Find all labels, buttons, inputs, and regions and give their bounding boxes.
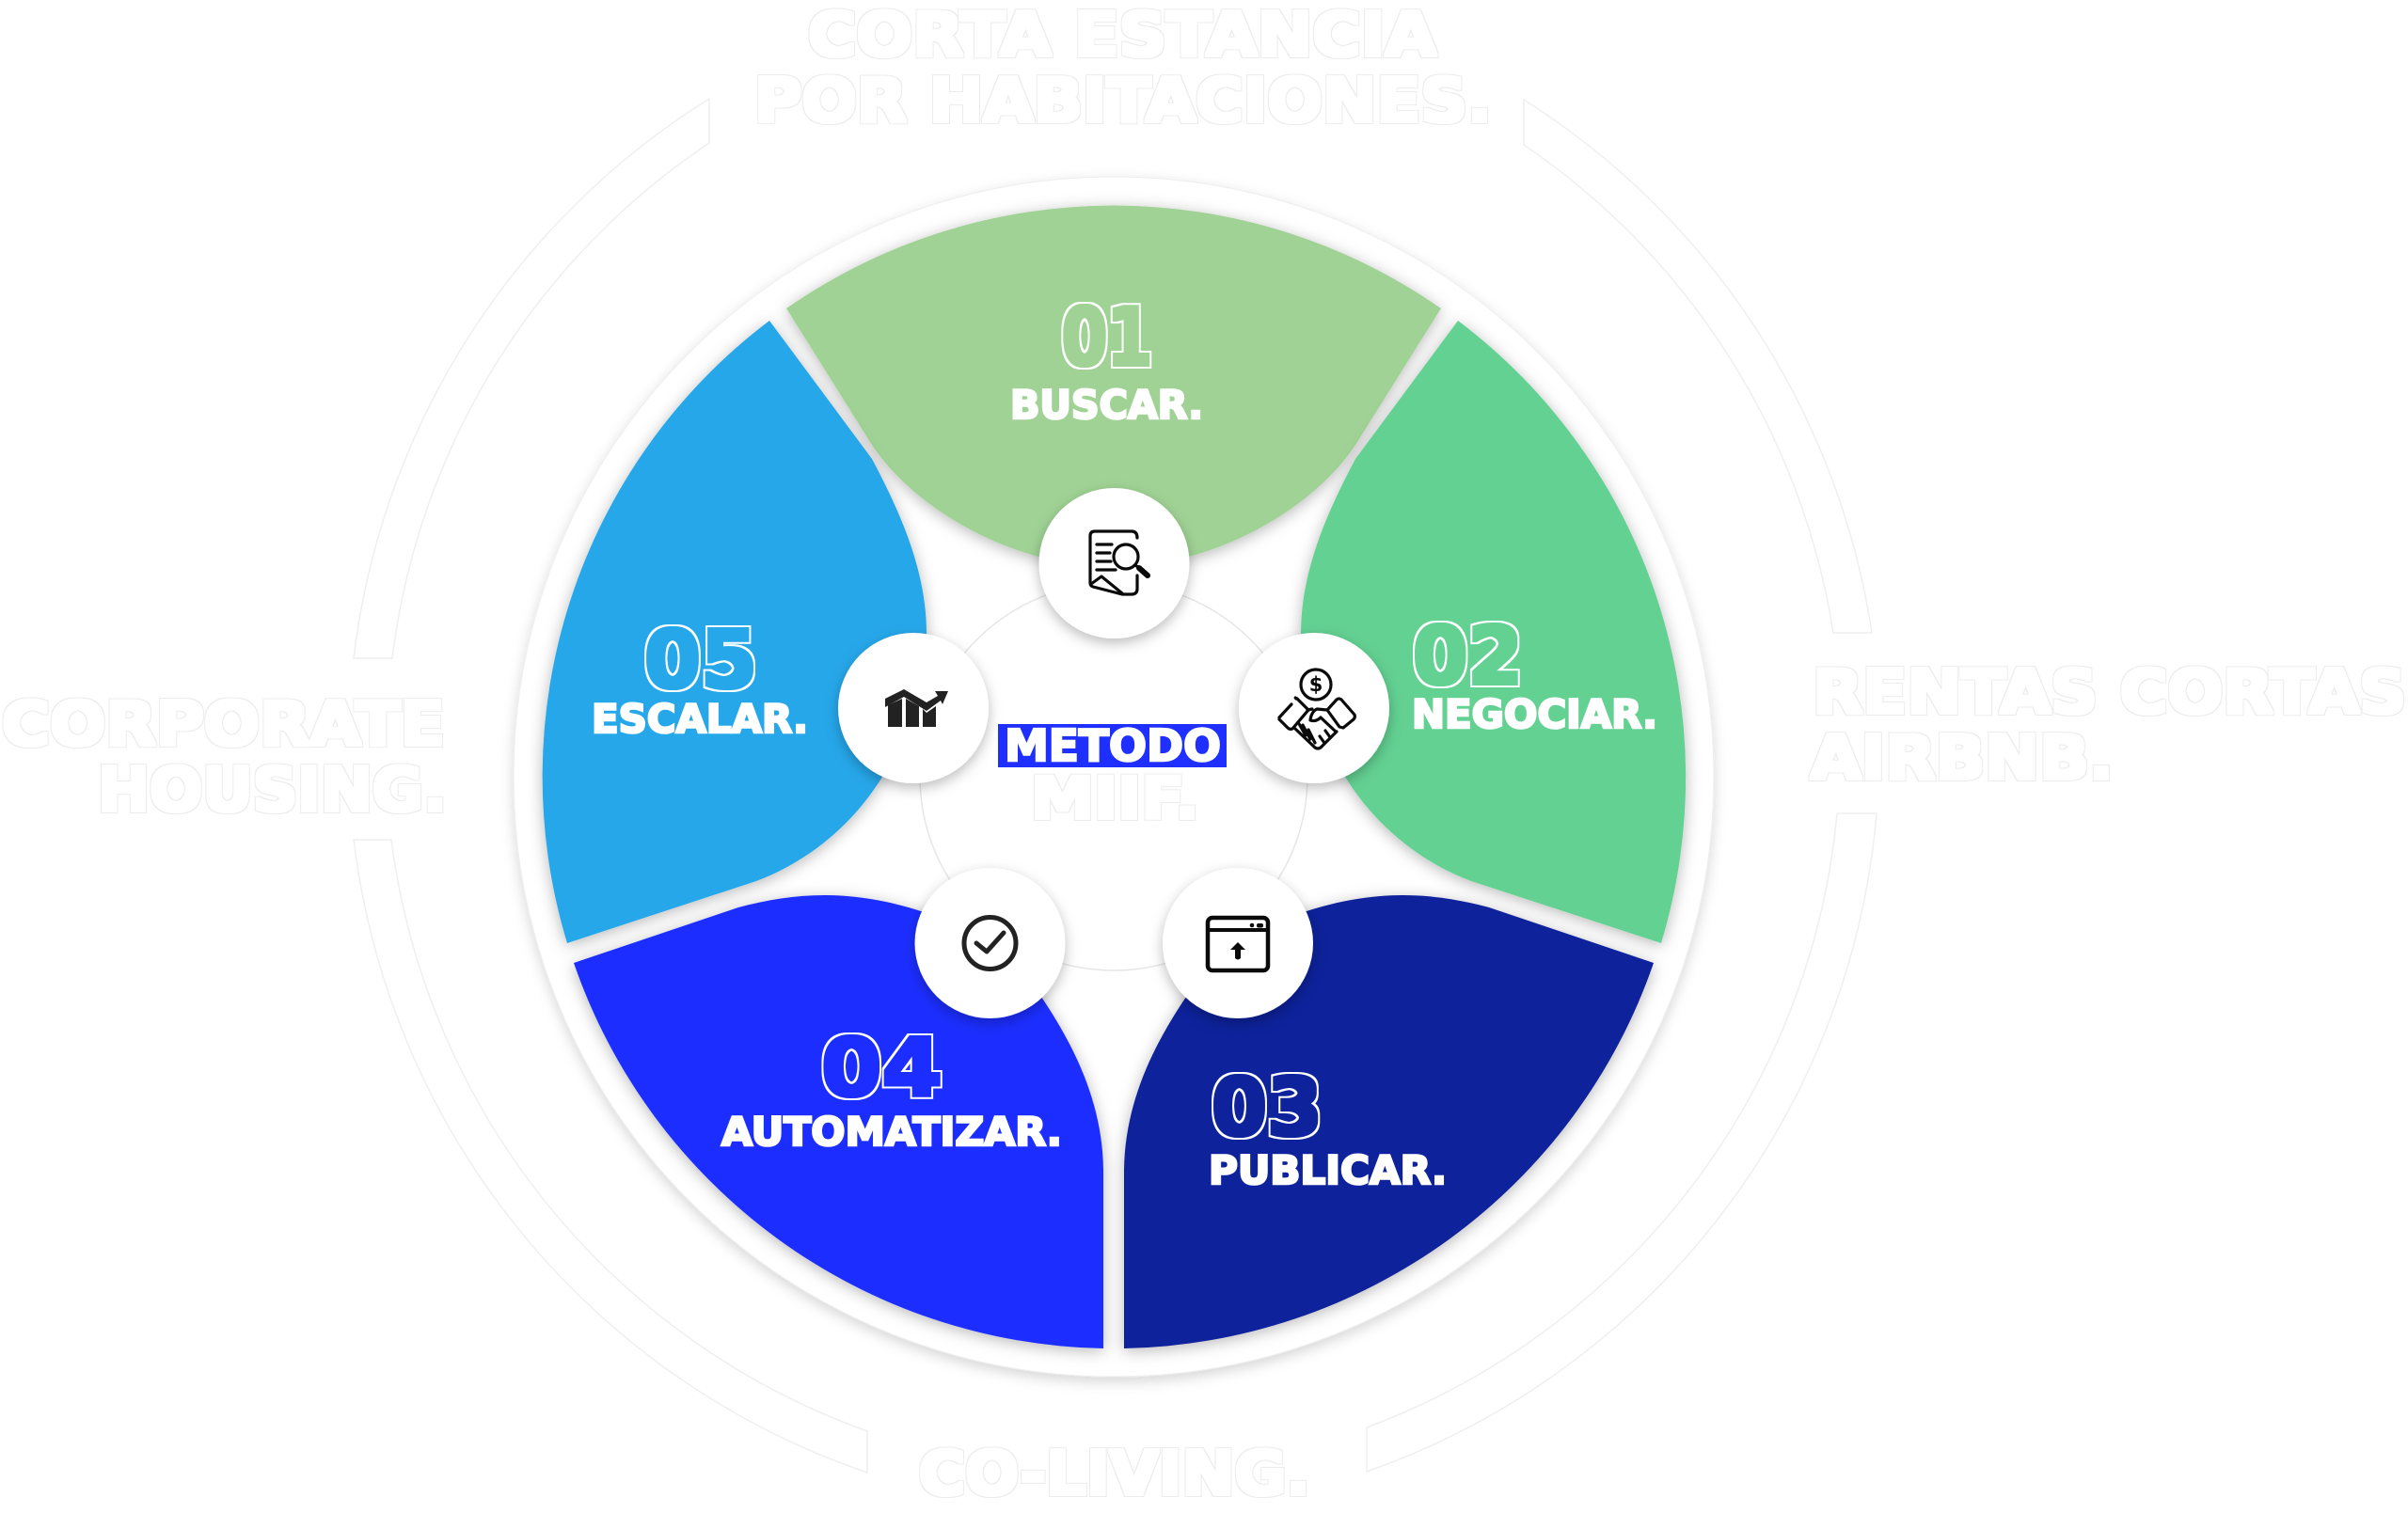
- panel: 02 negociar: NEGOCIAR.: [1412, 691, 1657, 737]
- panel: 03 publicar: [1124, 895, 1654, 1348]
- panel: 04 automatizar: 04: [821, 1022, 943, 1115]
- panel: 01 buscar: 01: [1062, 292, 1152, 385]
- outer faint label: rentas cortas: [1811, 658, 2406, 794]
- panel: 04 automatizar: AUTOMATIZAR.: [721, 1109, 1062, 1155]
- outer faint label: corta estancia: POR HABITACIONES.: [754, 67, 1492, 136]
- panel: 01 buscar: BUSCAR.: [1010, 382, 1203, 428]
- panel: 02 negociar: 02: [1413, 610, 1523, 703]
- outer ring arcs: [354, 99, 1877, 1473]
- icon: document search: [1038, 488, 1189, 638]
- panel: 02 negociar: [1301, 321, 1686, 943]
- icon: upload window: [1163, 868, 1313, 1018]
- panel: 05 escalar: [543, 321, 927, 943]
- icon: handshake with coin: $: [1309, 673, 1323, 696]
- outer faint label: rentas cortas: AIRBNB.: [1811, 724, 2114, 794]
- panel: 05 escalar: ESCALAR.: [592, 696, 808, 742]
- center title: MIIF.: [1031, 765, 1199, 832]
- center title: [998, 720, 1227, 832]
- panel: 04 automatizar: [574, 895, 1103, 1348]
- outer faint label: corporate housing: CORPORATE: [2, 690, 445, 760]
- outer faint label: corporate housing: HOUSING.: [98, 756, 447, 826]
- outer faint label: corporate housing: [2, 690, 447, 826]
- panel: 01 buscar: [786, 206, 1441, 568]
- center circle: [920, 583, 1307, 970]
- outer faint label: corta estancia: [754, 1, 1492, 136]
- panel: 05 escalar: 05: [644, 614, 757, 707]
- panel: 03 publicar: PUBLICAR.: [1209, 1147, 1447, 1193]
- center title: METODO: [1005, 720, 1221, 771]
- outer faint label: rentas cortas: RENTAS CORTAS: [1813, 658, 2406, 728]
- panel: 03 publicar: 03: [1212, 1062, 1323, 1155]
- icon: check circle: [914, 868, 1065, 1018]
- outer faint label: co-living: CO-LIVING.: [919, 1440, 1310, 1509]
- icon: growth chart: [838, 633, 989, 783]
- outer faint label: corta estancia: CORTA ESTANCIA: [808, 1, 1437, 71]
- icon: handshake with coin: [1239, 633, 1389, 783]
- wheel base disc: [514, 177, 1714, 1377]
